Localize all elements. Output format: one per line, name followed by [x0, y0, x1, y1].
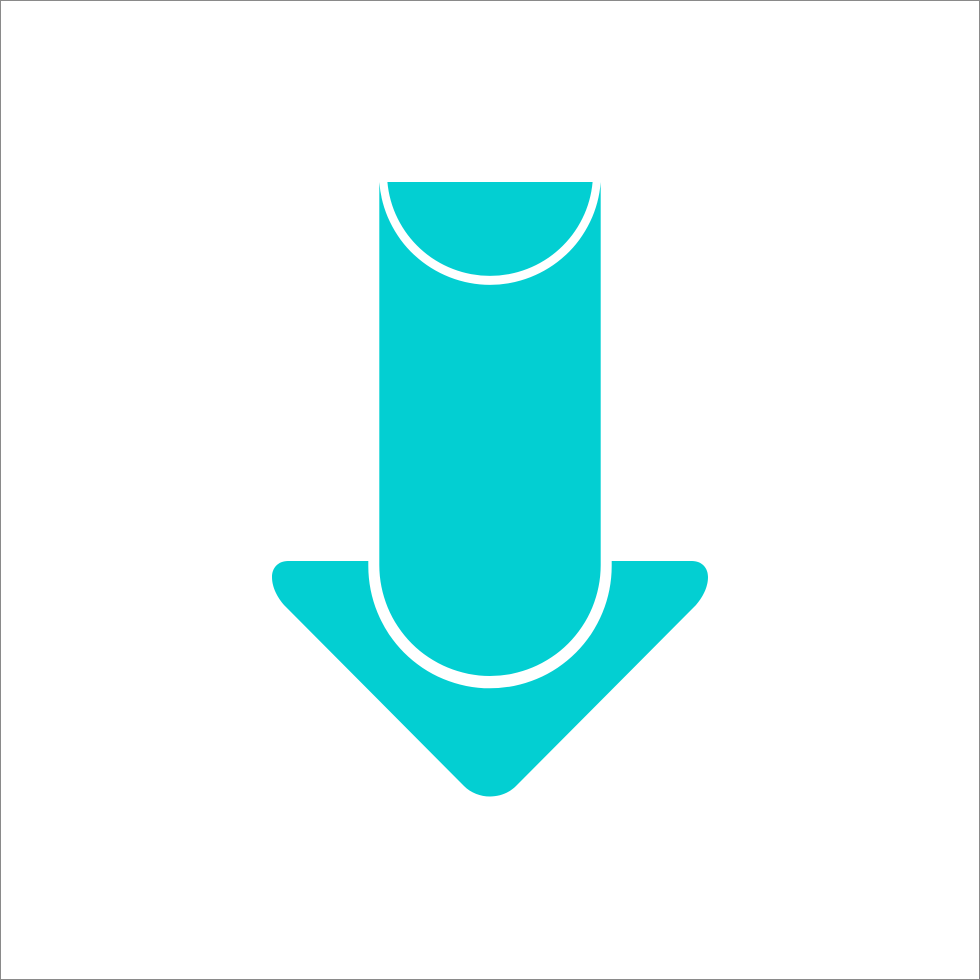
arrow shaft: [379, 182, 601, 676]
arrow head: [272, 561, 708, 796]
shaft top cap: [387, 182, 593, 276]
